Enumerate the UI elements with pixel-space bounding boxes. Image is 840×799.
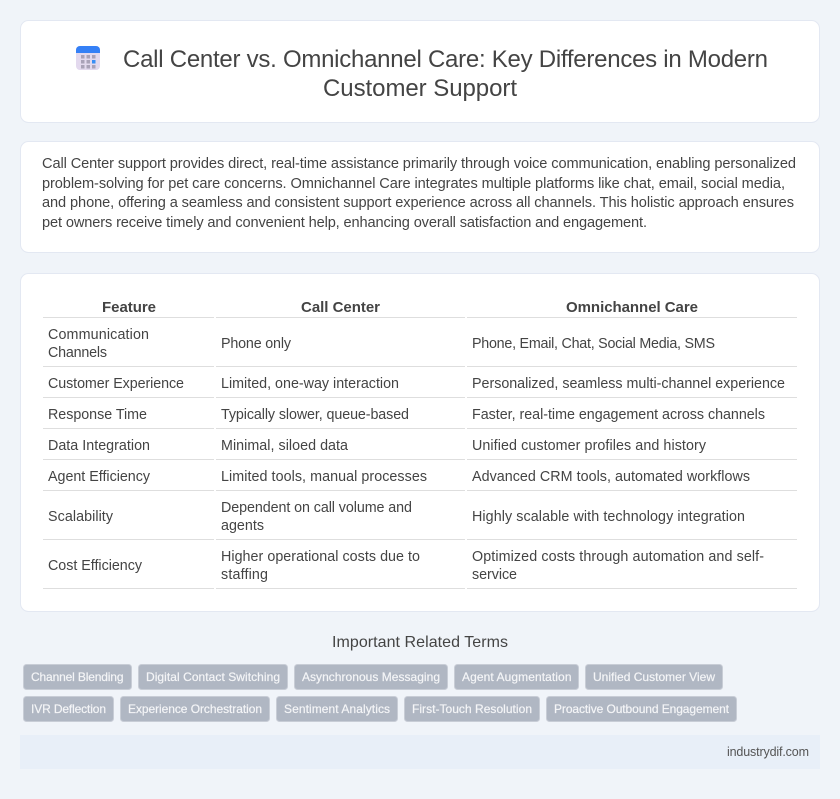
row: cost efficiency: service [472,567,517,583]
tag: first-touch resolution [404,696,540,722]
panel: comparison table card [20,274,820,612]
tag: channel blending [24,664,132,690]
footer bar [20,735,820,769]
row: cost efficiency: staffing [221,567,268,583]
tag: asynchronous messaging [294,664,448,690]
tag: first-touch resolution: First-Touch Resolution [412,702,532,716]
row: scalability: Highly scalable with technology integration [472,509,745,525]
row: customer experience: Personalized, seamless multi-channel experience [472,376,785,392]
row: response time [48,407,765,423]
row: scalability: Dependent on call volume and [221,500,412,516]
row: data integration [48,438,707,454]
summary text: problem-solving for pet care concerns. Omnichannel Care integrates multiple platforms like chat, email, social media, [42,176,785,192]
tag: proactive outbound engagement [546,696,736,722]
row: data integration: Unified customer profiles and history [472,438,707,454]
row: communication channels: Channels [48,345,107,361]
tag: experience orchestration: Experience Orchestration [128,702,262,716]
row: agent efficiency: Advanced CRM tools, automated workflows [472,469,750,485]
table header row: Feature [102,299,156,316]
heading: important related terms: Important Related Terms [332,634,508,651]
summary text: and phone, offering a seamless and consistent support experience across all channels. This holistic approach ensures [42,195,794,211]
row: communication channels: Phone, Email, Chat, Social Media, SMS [472,336,715,352]
summary text: Call Center support provides direct, real-time assistance primarily through voice communication, enabling personalized [42,156,796,172]
tag: proactive outbound engagement: Proactive Outbound Engagement [554,702,730,716]
row: response time: Typically slower, queue-based [221,407,409,423]
table header row [102,299,698,316]
title [123,46,768,102]
row: cost efficiency: Optimized costs through automation and self- [472,549,764,565]
row: customer experience: Customer Experience [48,376,184,392]
row: response time: Response Time [48,407,147,423]
row: scalability [48,500,745,534]
row: cost efficiency [48,549,764,583]
icon: calendar [76,46,100,70]
tag: sentiment analytics: Sentiment Analytics [284,702,390,716]
row: agent efficiency: Limited tools, manual processes [221,469,427,485]
table header row: Omnichannel Care [566,299,698,316]
row: customer experience: Limited, one-way interaction [221,376,399,392]
row: data integration: Data Integration [48,438,150,454]
row: communication channels: Communication [48,327,149,343]
tag: agent augmentation: Agent Augmentation [462,670,572,684]
row: cost efficiency: Higher operational costs due to [221,549,420,565]
footer source text: industrydif.com [727,745,809,759]
row: communication channels [48,327,715,361]
row: data integration: Minimal, siloed data [221,438,348,454]
row: communication channels: Phone only [221,336,292,352]
tag group: related terms [24,664,736,722]
summary text: pet owners receive timely and convenient help, enhancing overall satisfaction and engagement. [42,215,647,231]
tag: experience orchestration [120,696,270,722]
row: scalability: agents [221,518,264,534]
row: agent efficiency [48,469,750,485]
tag: unified customer view: Unified Customer View [593,670,715,684]
panel: header card [20,20,820,122]
row: agent efficiency: Agent Efficiency [48,469,151,485]
tag: sentiment analytics [276,696,398,722]
tag: digital contact switching: Digital Contact Switching [146,670,280,684]
row: scalability: Scalability [48,509,114,525]
title: Customer Support [323,75,517,102]
tag: digital contact switching [138,664,288,690]
row: customer experience [48,376,785,392]
tag: unified customer view [586,664,722,690]
table header row: Call Center [301,299,380,316]
panel: summary card [20,142,820,252]
title: Call Center vs. Omnichannel Care: Key Differences in Modern [123,46,768,73]
tag: agent augmentation [454,664,578,690]
row: cost efficiency: Cost Efficiency [48,558,143,574]
tag: ivr deflection: IVR Deflection [31,702,106,716]
row: response time: Faster, real-time engagement across channels [472,407,765,423]
tag: asynchronous messaging: Asynchronous Messaging [302,670,440,684]
summary text [42,156,796,231]
tag: ivr deflection [24,696,114,722]
tag: channel blending: Channel Blending [31,670,124,684]
